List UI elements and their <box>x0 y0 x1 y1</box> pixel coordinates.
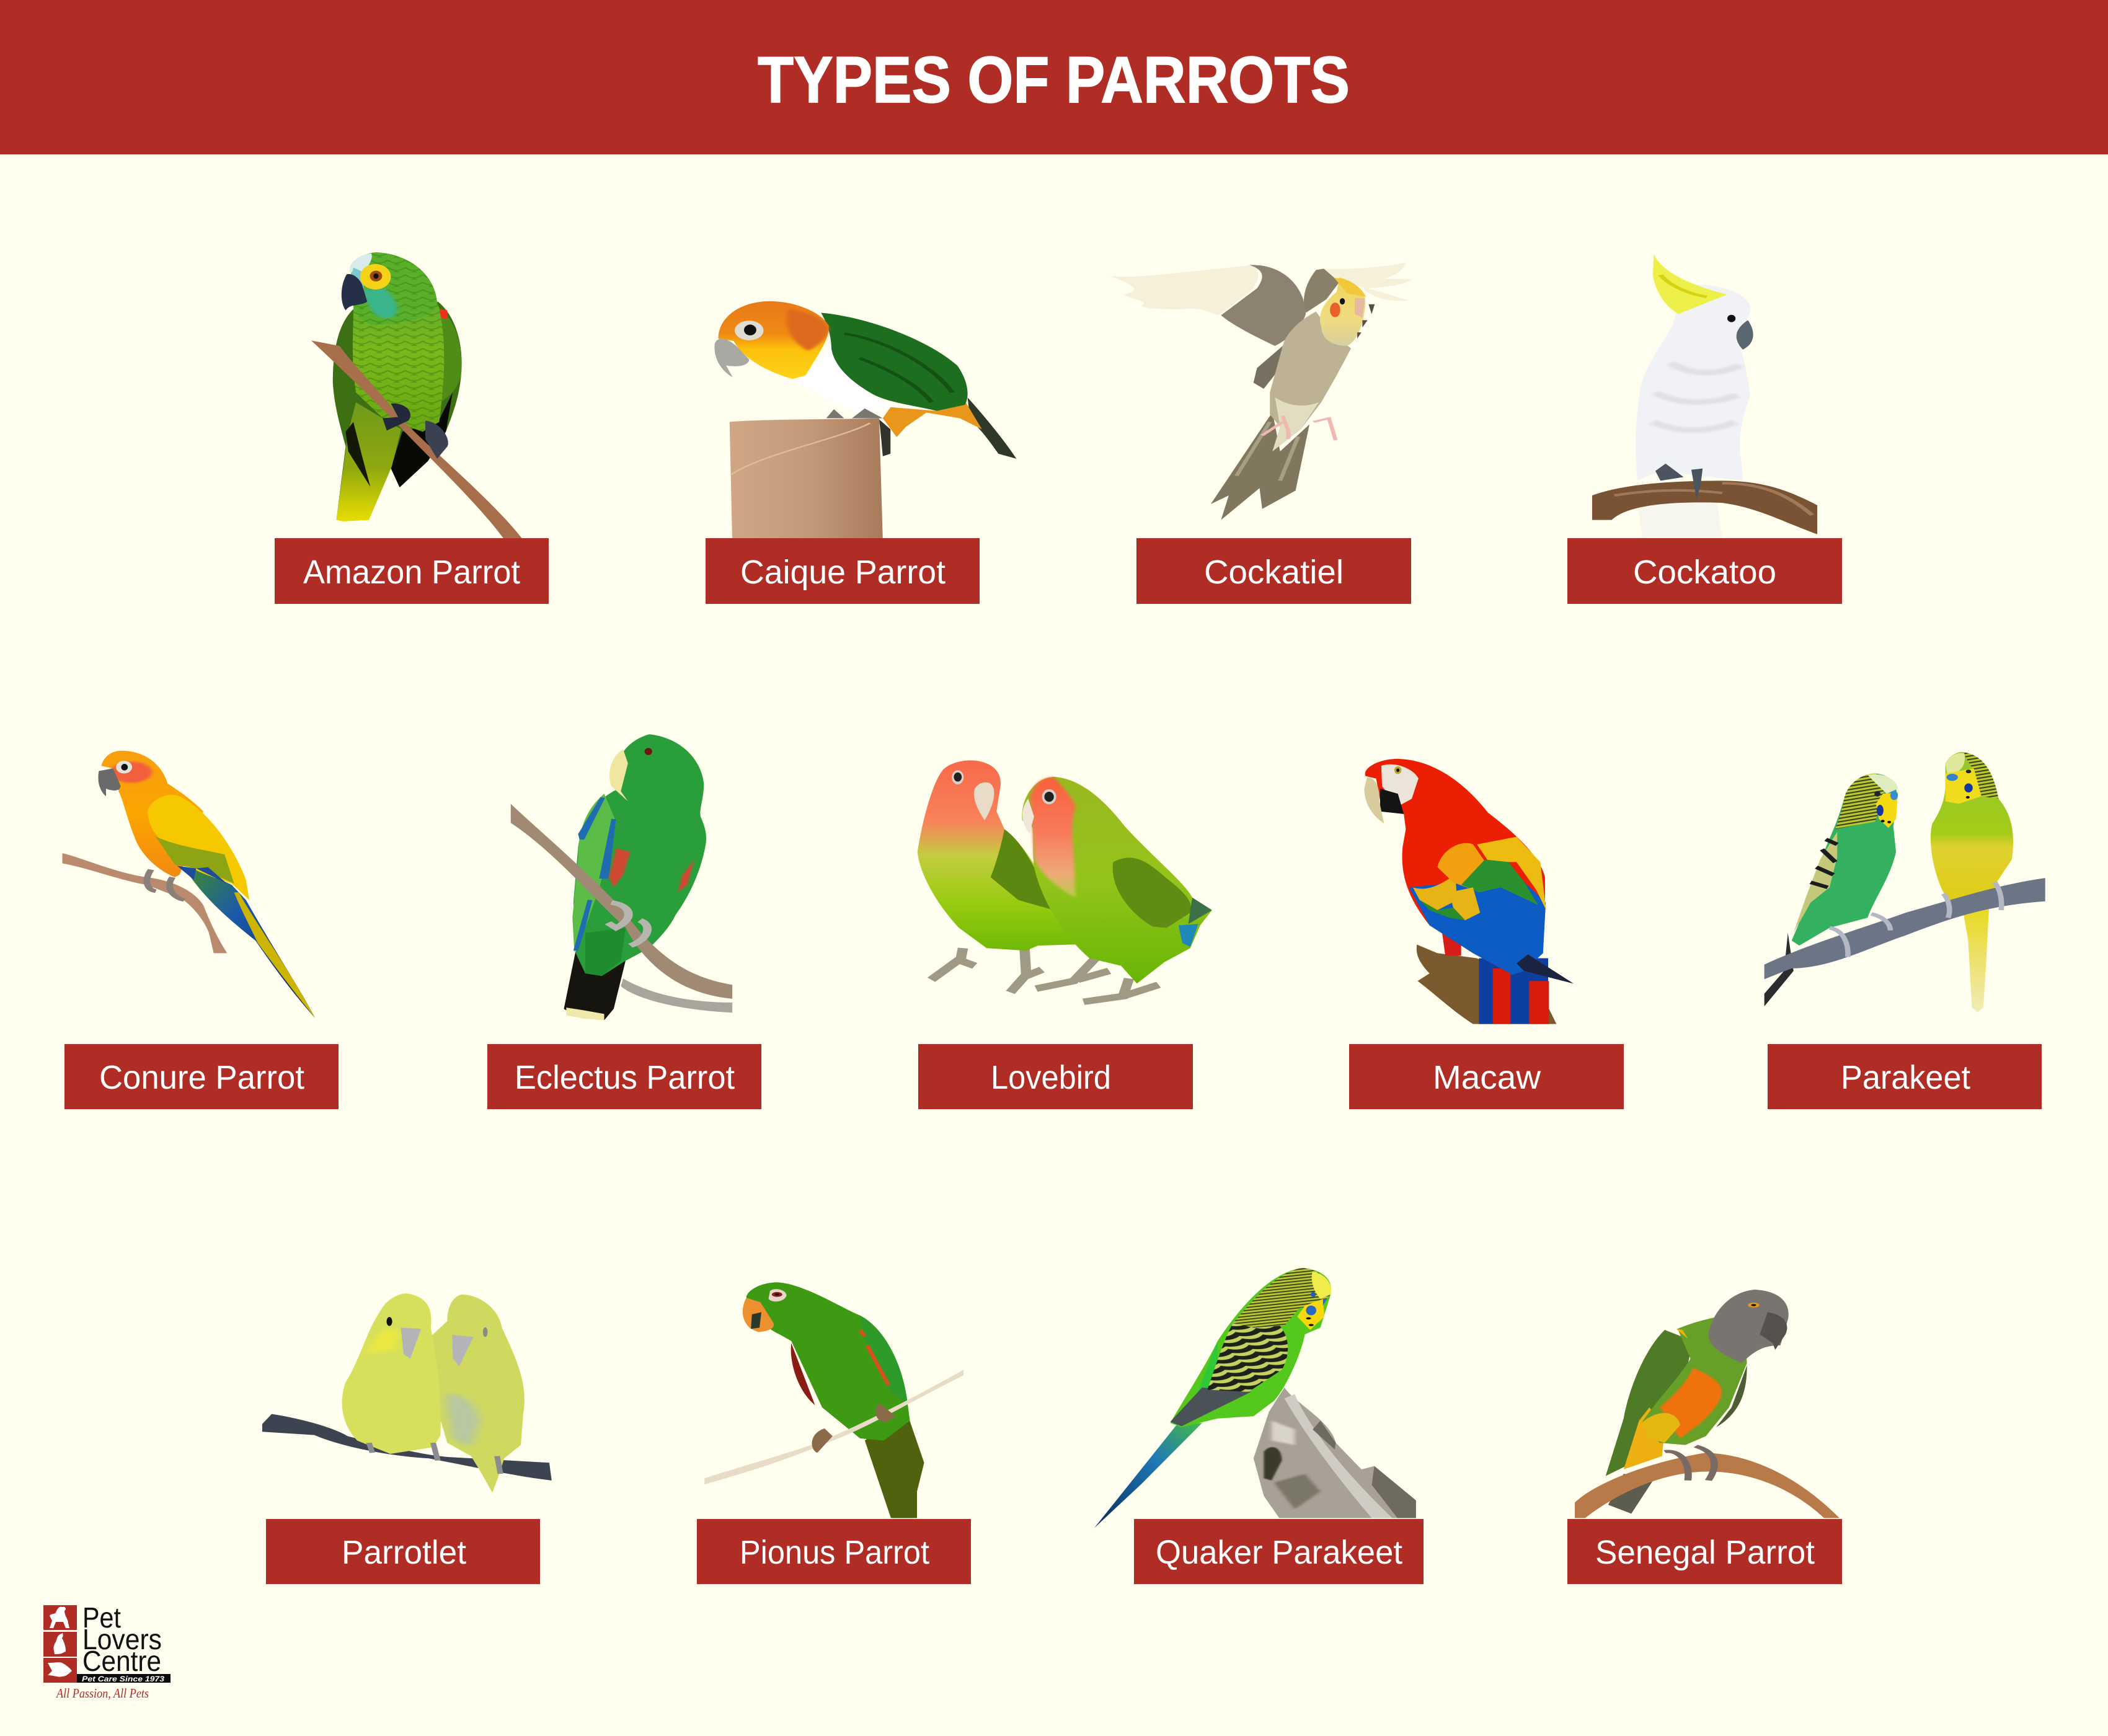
icon: cat <box>43 1632 77 1657</box>
illustration: green parrot on a thin branch <box>704 1282 963 1518</box>
label: Pionus Parrot <box>697 1519 971 1584</box>
label: Eclectus Parrot <box>487 1044 761 1109</box>
illustration: senegal parrot on a wicker arch <box>1575 1290 1840 1518</box>
illustration: scarlet macaw on a stump <box>1364 759 1574 1024</box>
label: Parrotlet: Parrotlet <box>342 1534 466 1571</box>
brand logo <box>43 1601 170 1701</box>
logo tagline: All Passion, All Pets <box>55 1686 149 1701</box>
label: Macaw <box>1349 1044 1624 1109</box>
panel: Cockatiel <box>1110 262 1412 604</box>
illustration: cockatiel in flight <box>1110 262 1412 520</box>
label: Lovebird: Lovebird <box>991 1059 1111 1096</box>
panel: Cockatoo <box>1567 254 1842 604</box>
label: Amazon Parrot <box>275 538 549 604</box>
logo wordmark: Pet <box>82 1601 121 1634</box>
label: Cockatoo <box>1567 538 1842 604</box>
label: Parakeet: Parakeet <box>1841 1059 1970 1096</box>
panel: Eclectus Parrot <box>487 734 761 1109</box>
label: Pionus Parrot: Pionus Parrot <box>740 1534 929 1571</box>
label: Senegal Parrot: Senegal Parrot <box>1595 1534 1815 1571</box>
illustration: amazon parrot on a branch <box>311 252 522 538</box>
label: Caique Parrot <box>706 538 980 604</box>
panel: Macaw <box>1349 759 1624 1109</box>
panel: Amazon Parrot <box>275 252 549 604</box>
header banner <box>0 0 2108 154</box>
illustration: two parrotlets on a dark branch <box>262 1293 552 1492</box>
label: Parrotlet <box>266 1519 540 1584</box>
label: Quaker Parakeet <box>1134 1519 1424 1584</box>
panel: Pionus Parrot <box>697 1282 971 1584</box>
panel: Conure Parrot <box>63 751 339 1109</box>
illustration: sun conure on a branch <box>63 751 315 1017</box>
illustration: pair of lovebirds <box>918 760 1212 1002</box>
icon: poodle <box>43 1605 77 1630</box>
illustration: caique parrot on a cardboard tube <box>714 301 1016 538</box>
label: Eclectus Parrot: Eclectus Parrot <box>515 1059 735 1096</box>
icon: fish <box>43 1658 77 1683</box>
label: Parakeet <box>1768 1044 2042 1109</box>
logo strap: Pet Care Since 1973: Pet Care Since 1973 <box>82 1675 164 1683</box>
illustration: budgerigar on a rock <box>1094 1268 1416 1528</box>
logo wordmark <box>82 1601 162 1677</box>
logo wordmark: Centre <box>82 1645 161 1677</box>
label: Senegal Parrot <box>1567 1519 1842 1584</box>
label: Cockatiel: Cockatiel <box>1204 554 1344 591</box>
label: Quaker Parakeet: Quaker Parakeet <box>1156 1534 1402 1571</box>
panel: Lovebird <box>918 760 1212 1109</box>
panel: Caique Parrot <box>706 301 1016 604</box>
label: Lovebird <box>918 1044 1193 1109</box>
panel: Parakeet <box>1765 752 2045 1109</box>
label: Caique Parrot: Caique Parrot <box>740 554 946 591</box>
illustration: two parakeets on a grey branch <box>1765 752 2045 1012</box>
label: Cockatiel <box>1136 538 1411 604</box>
label: Cockatoo: Cockatoo <box>1633 554 1776 591</box>
label: Amazon Parrot: Amazon Parrot <box>303 554 520 591</box>
panel: Quaker Parakeet <box>1094 1268 1424 1584</box>
logo wordmark: Lovers <box>82 1623 162 1655</box>
panel: Senegal Parrot <box>1567 1290 1842 1584</box>
illustration: white cockatoo with yellow crest <box>1592 254 1817 538</box>
label: Macaw: Macaw <box>1433 1059 1541 1096</box>
title: TYPES OF PARROTS <box>758 43 1350 117</box>
panel: Parrotlet <box>262 1293 552 1584</box>
label: Conure Parrot: Conure Parrot <box>99 1059 304 1096</box>
label: Conure Parrot <box>64 1044 339 1109</box>
illustration: eclectus parrot on a branch <box>511 734 732 1021</box>
